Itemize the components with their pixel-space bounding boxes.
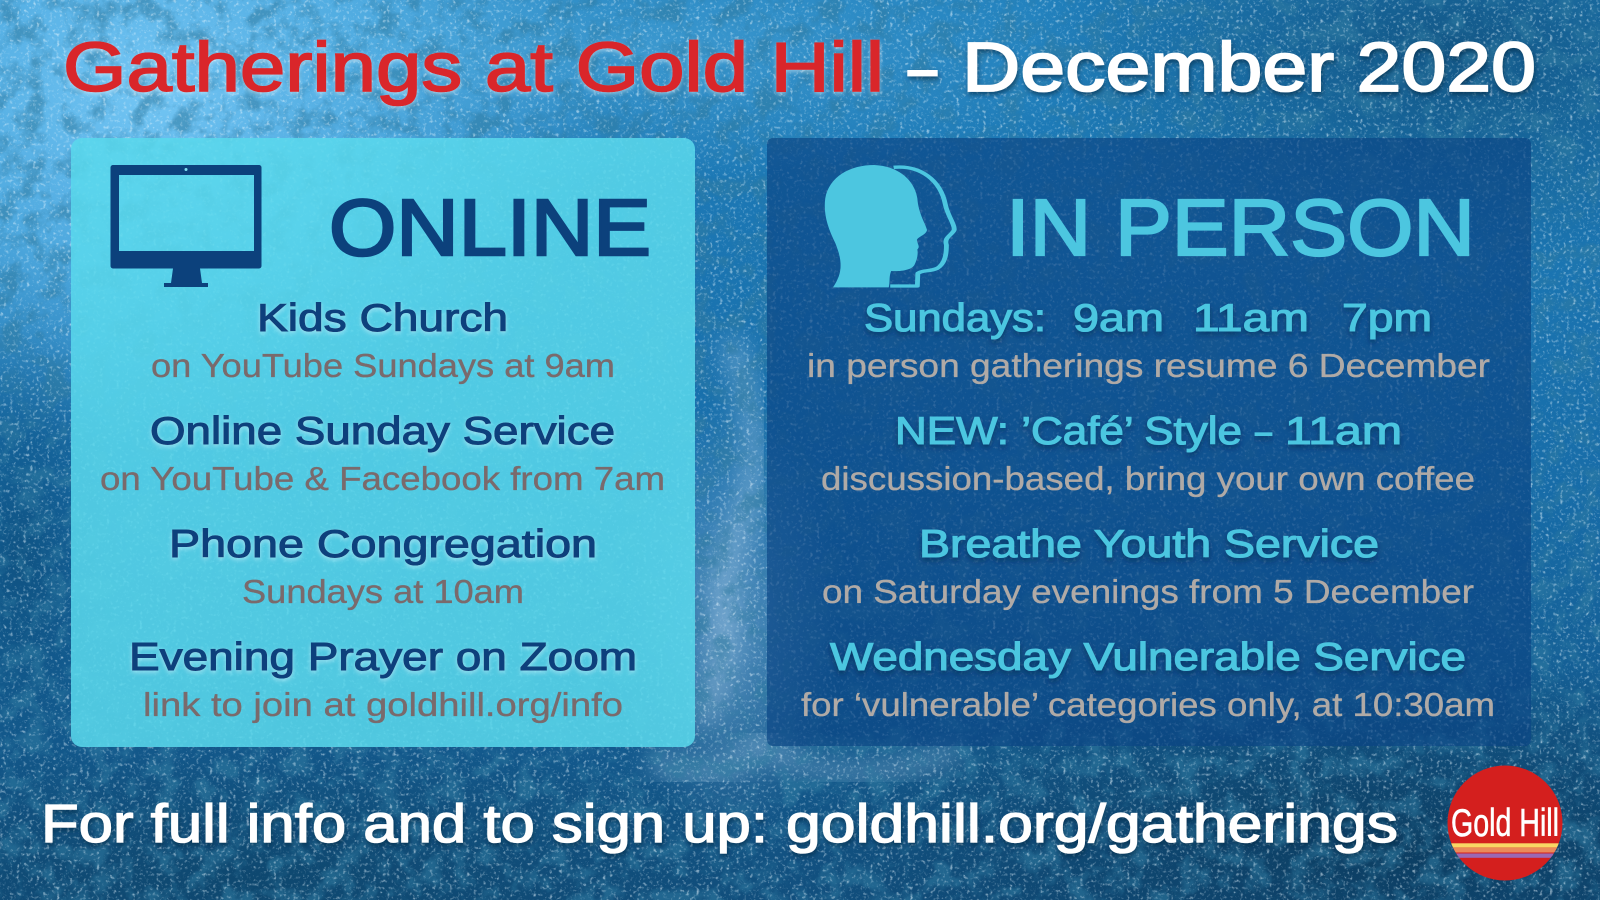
entry: evening prayer on zoom: Evening Prayer on Zoom (129, 636, 637, 679)
entry: cafe style: 11am (1285, 410, 1402, 453)
sundays note: in person gatherings resume 6 December (807, 347, 1490, 384)
logo: Gold Hill: Gold Hill (1451, 802, 1559, 845)
entry: wednesday vulnerable service (801, 636, 1495, 723)
entry: kids church: Kids Church (257, 297, 508, 340)
panel: in person (767, 138, 1531, 746)
entry: online sunday service: on YouTube & Facebook from 7am (100, 460, 665, 497)
entry: sundays (864, 297, 1432, 340)
footer call to action (41, 794, 1398, 854)
entry: evening prayer on zoom: link to join at goldhill.org/info (143, 686, 623, 723)
entry: cafe style: NEW: ’Café’ Style (895, 410, 1242, 453)
entry: phone congregation: Sundays at 10am (242, 573, 524, 610)
entry: cafe style: – (1255, 410, 1272, 453)
entry: breathe youth service: on Saturday evenings from 5 December (822, 573, 1474, 610)
entry: kids church: on YouTube Sundays at 9am (151, 347, 615, 384)
entry: kids church (151, 297, 615, 384)
heading: online: ONLINE (329, 183, 651, 272)
entry: phone congregation (169, 523, 597, 610)
entry: sundays: Sundays: (864, 297, 1046, 340)
entry: wednesday vulnerable service: for ‘vulnerable’ categories only, at 10:30am (801, 686, 1495, 723)
heading: in person: IN PERSON (1006, 183, 1475, 272)
icon: overlapping head profiles (825, 165, 954, 287)
entry: phone congregation: Phone Congregation (169, 523, 597, 566)
entry: sundays: 11am (1193, 297, 1309, 340)
footer call to action: goldhill.org/gatherings (786, 794, 1398, 854)
entry: evening prayer on zoom (129, 636, 637, 723)
entry: wednesday vulnerable service: Wednesday Vulnerable Service (830, 636, 1466, 679)
entry: breathe youth service (822, 523, 1474, 610)
icon: computer monitor (110, 165, 262, 287)
entry: cafe style: discussion-based, bring your own coffee (821, 460, 1475, 497)
entry: sundays: 9am (1073, 297, 1164, 340)
footer call to action: For full info and to sign up: (41, 794, 768, 854)
entry: sundays: 7pm (1342, 297, 1432, 340)
panel: online (71, 138, 695, 747)
title: red part: Gatherings at Gold Hill (63, 28, 884, 106)
entry: breathe youth service: Breathe Youth Service (919, 523, 1379, 566)
entry: cafe style (821, 410, 1475, 497)
entry: online sunday service (100, 410, 665, 497)
logo: Gold Hill (1448, 766, 1562, 880)
entry: online sunday service: Online Sunday Service (150, 410, 615, 453)
title: white date: – (908, 28, 937, 106)
title: white date: December 2020 (962, 28, 1536, 106)
